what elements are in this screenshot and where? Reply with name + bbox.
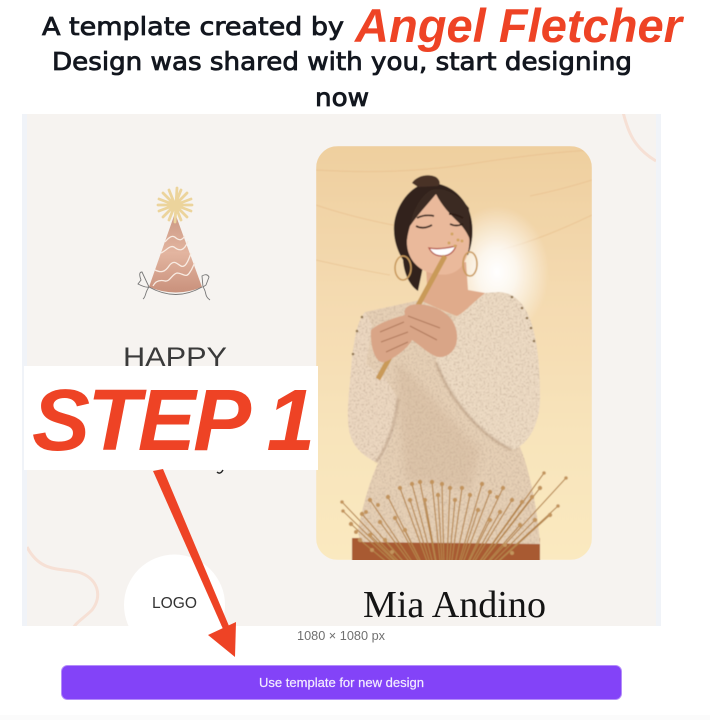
hat waves bbox=[153, 236, 195, 286]
sun glow bbox=[464, 211, 545, 316]
text: LOGO: LOGO bbox=[152, 595, 197, 612]
flower stick bbox=[378, 256, 445, 379]
dried flowers bbox=[342, 474, 566, 560]
skirt bbox=[352, 538, 540, 562]
sweater right sleeve bbox=[436, 292, 540, 450]
heading: now: now bbox=[315, 83, 369, 112]
button: use template bbox=[62, 666, 622, 700]
footer strip bbox=[0, 715, 710, 720]
smile bbox=[429, 246, 456, 256]
face bbox=[407, 193, 469, 275]
text: HAPPY: HAPPY bbox=[123, 342, 227, 372]
hat pom-pom bbox=[158, 188, 192, 222]
hoop earrings bbox=[395, 252, 477, 280]
button: use template: Use template for new design bbox=[259, 676, 424, 690]
hair back bbox=[394, 183, 472, 291]
hands bbox=[371, 304, 457, 362]
heading: design shared line: Design was shared with you, start designing bbox=[52, 47, 632, 76]
text: Mia Andino: Mia Andino bbox=[363, 584, 546, 626]
sleeve studs bbox=[352, 296, 535, 355]
hat cone bbox=[149, 213, 202, 292]
hat string and bows bbox=[138, 272, 210, 300]
hair bun bbox=[412, 175, 440, 187]
text: template dimensions: 1080 × 1080 px bbox=[297, 629, 386, 643]
callout: STEP 1: STEP 1 bbox=[32, 372, 315, 469]
sweater left sleeve bbox=[348, 312, 398, 463]
heading: creator name: Angel Fletcher bbox=[354, 0, 685, 52]
logo circle bbox=[124, 554, 225, 626]
bangs bbox=[410, 189, 470, 240]
squiggle: top right bbox=[623, 112, 656, 161]
sweater shading bbox=[376, 362, 512, 462]
icon: party hat bbox=[138, 188, 210, 300]
sweater body bbox=[352, 300, 540, 544]
eyes bbox=[416, 214, 463, 228]
neck bbox=[420, 262, 485, 316]
photo: smiling woman with dried flowers bbox=[316, 146, 592, 560]
squiggle: bottom left bbox=[27, 547, 98, 630]
panel: template preview card bbox=[22, 112, 661, 630]
glyph remnant below callout bbox=[217, 470, 223, 473]
heading: template credit: A template created by bbox=[42, 12, 344, 41]
arrow: pointing to button bbox=[153, 469, 236, 657]
photo backdrop bbox=[316, 146, 592, 560]
